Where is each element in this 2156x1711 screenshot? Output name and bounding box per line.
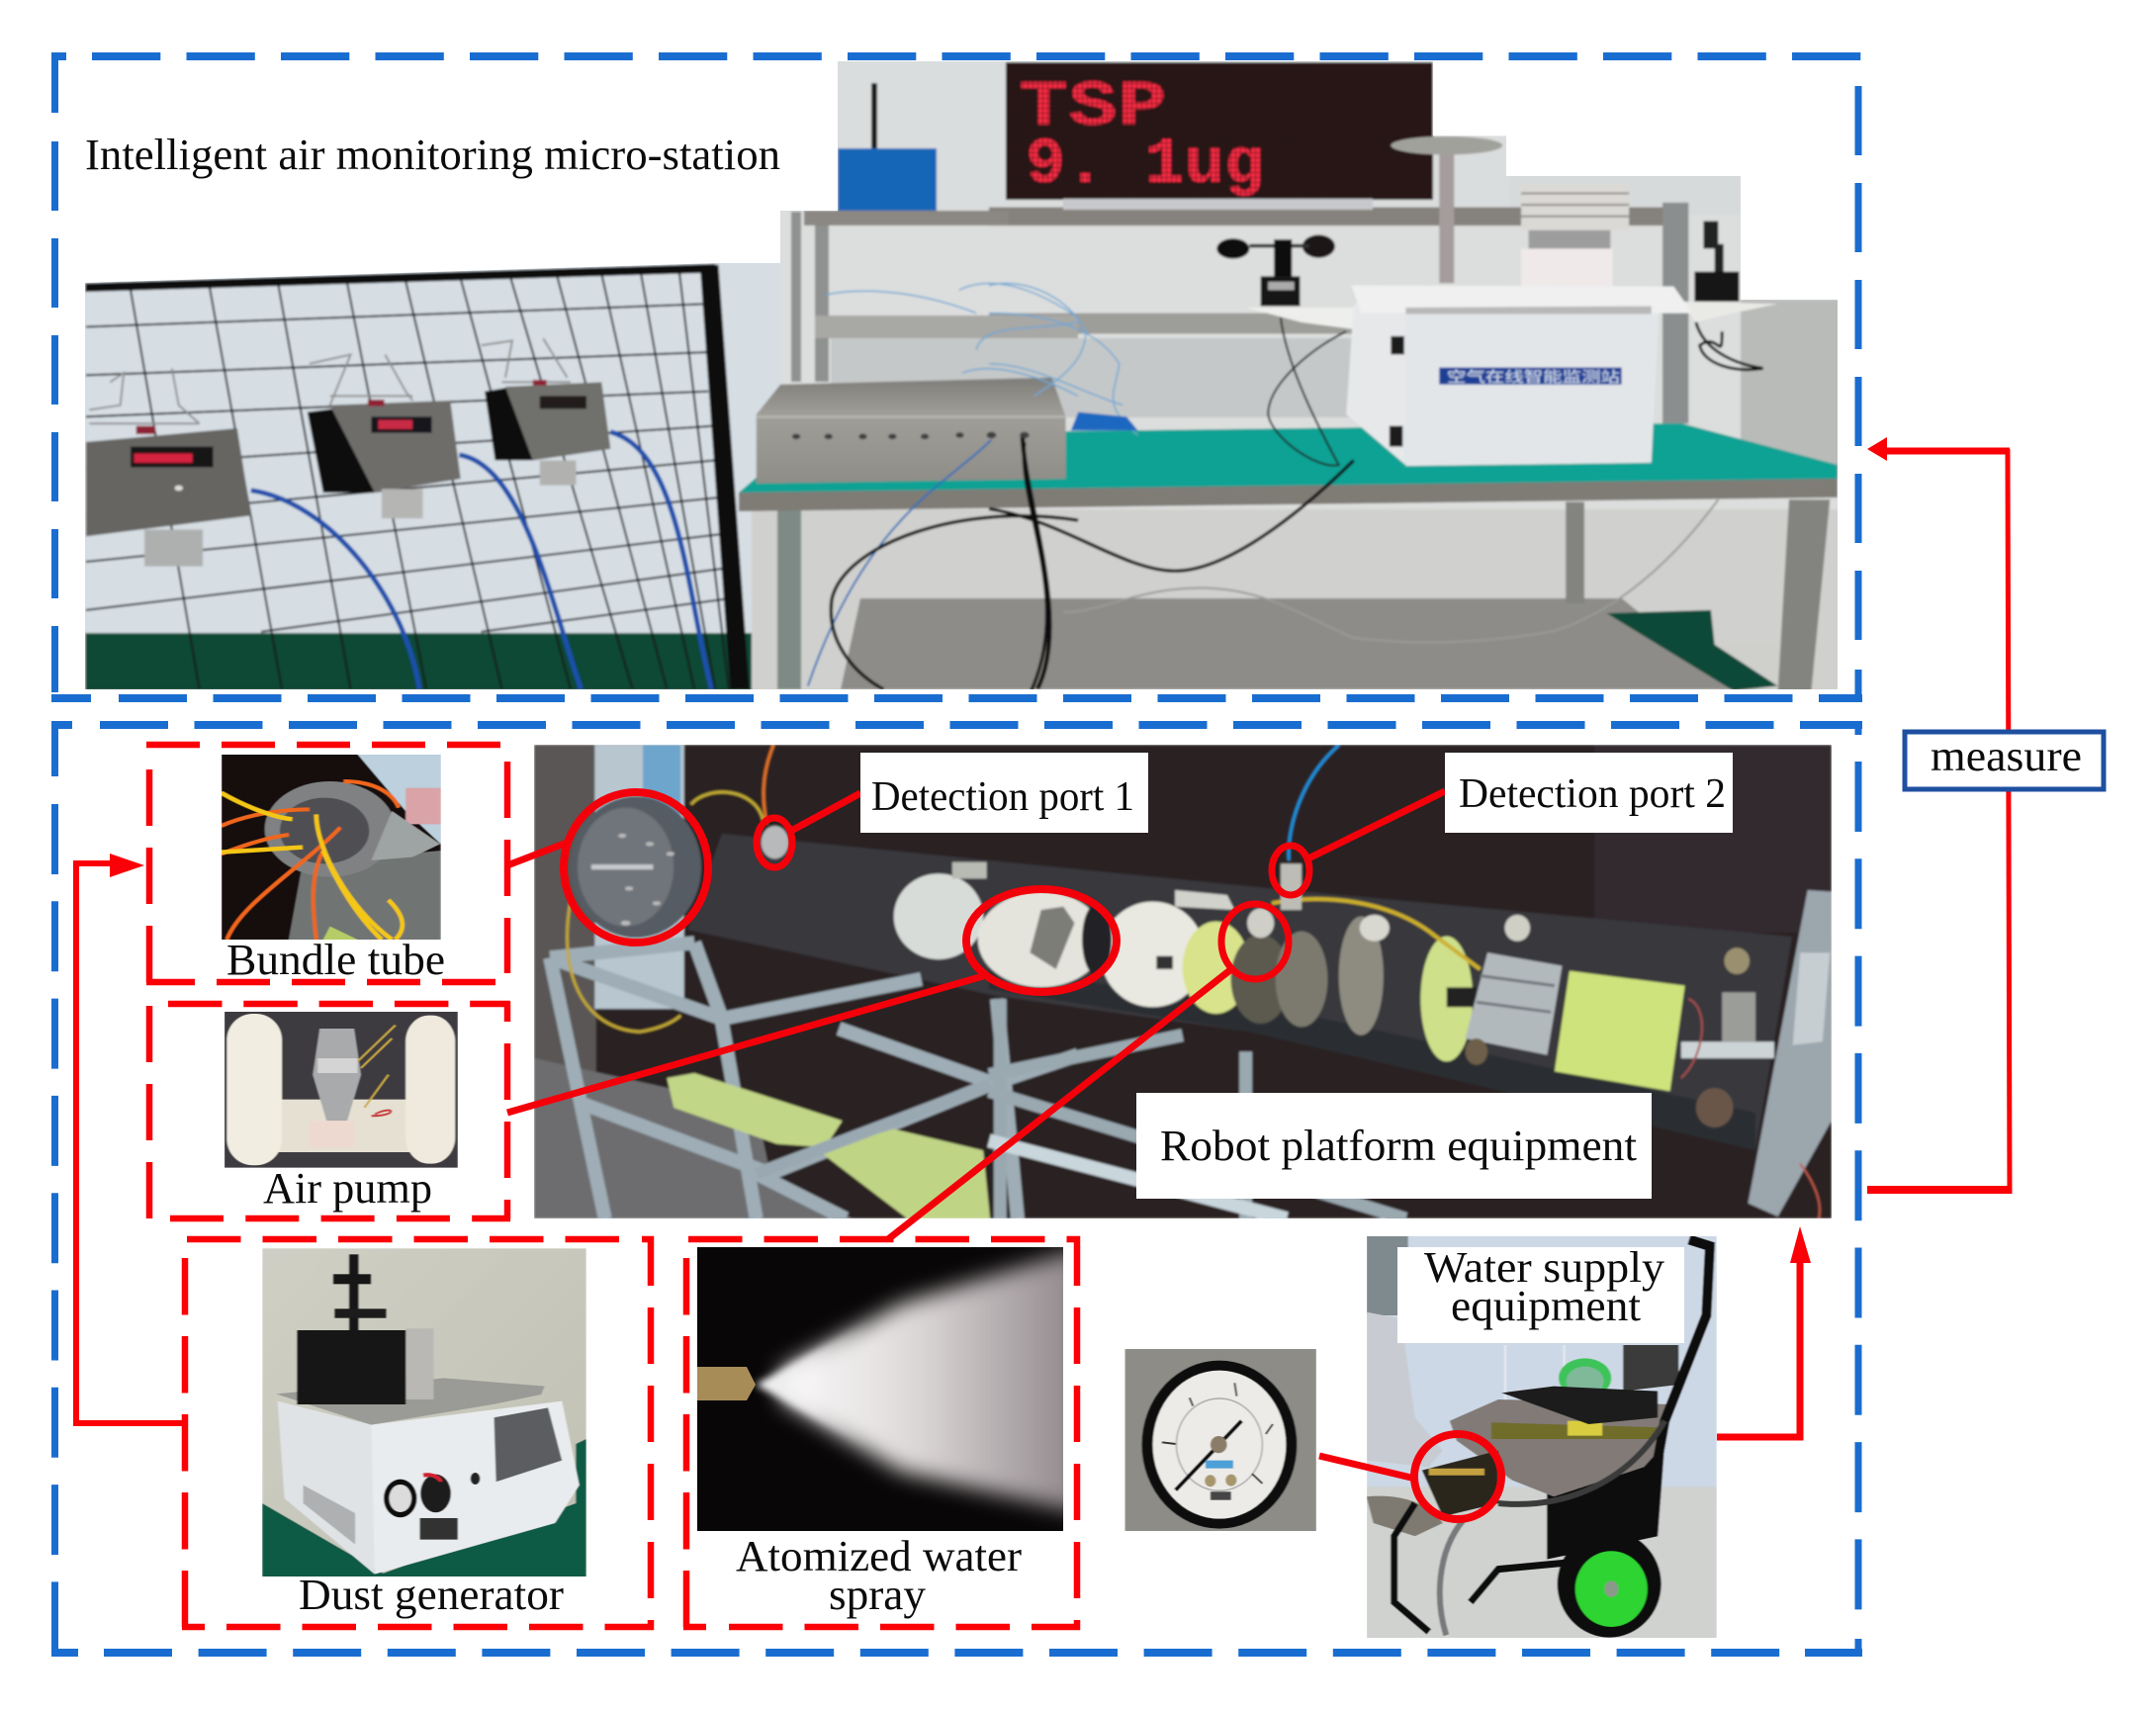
panel: intelligent air monitoring micro-station: [51, 52, 1862, 702]
photo: dust generator: [262, 1248, 586, 1576]
LED display: [1006, 62, 1433, 202]
wires and port 2: [1289, 745, 1339, 860]
photo: water supply equipment: [1367, 1236, 1717, 1639]
wind sensors: [1216, 238, 1249, 259]
green cylinders: [667, 1073, 843, 1147]
white carriage: [894, 873, 983, 959]
label: Robot platform equipment: [1136, 1093, 1652, 1199]
panel: robot platform and supply equipment: [51, 437, 2104, 1657]
LED display: 9. 1ug: [1026, 128, 1264, 202]
cables: [251, 432, 712, 689]
label: Atomized water spray: spray: [829, 1571, 926, 1619]
dashed border: lower panel: [51, 721, 1862, 1657]
wall, shelves and table: [1087, 241, 1733, 439]
label: Water supply equipment: Water supply: [1424, 1243, 1664, 1292]
label: Atomized water spray: [736, 1532, 1022, 1619]
label: Detection port 2: [1445, 753, 1733, 833]
red callout rings and leader lines: [507, 791, 1445, 1239]
photo: pressure gauge: [1125, 1349, 1316, 1531]
wires: [764, 745, 773, 824]
component: dust generator: [182, 1236, 654, 1630]
transparent tube end: [571, 796, 701, 938]
robot sections: [1101, 902, 1205, 1007]
sensors: [86, 428, 251, 536]
component: atomized water spray: [683, 1236, 1083, 1630]
tube body: [687, 834, 1792, 1150]
port 1 fitting: [762, 826, 788, 858]
hooks: [89, 338, 571, 423]
label: Detection port 1: Detection port 1: [871, 774, 1134, 820]
steel control box: [757, 284, 1078, 690]
sensor plates: [1246, 308, 1354, 329]
photo: monitoring station and sensors: [79, 59, 1849, 697]
dashed border: air pump: [149, 1002, 510, 1219]
photo: robot platform equipment in tube: [534, 745, 1832, 1218]
label: measure: measure: [1931, 732, 2082, 780]
label: Detection port 1: [860, 753, 1148, 833]
dashed border: bundle tube: [146, 745, 507, 982]
cabinet nameplate: 空气在线智能监测站: [1447, 366, 1620, 387]
label: Atomized water spray: Atomized water: [736, 1532, 1022, 1580]
arrow: dust generator and feed to bundle tube: [76, 854, 184, 1423]
aluminium frame: [550, 943, 1078, 1218]
label: Detection port 2: Detection port 2: [1459, 771, 1726, 817]
photo: bundle tube: [222, 755, 441, 940]
component: air pump: [149, 1002, 510, 1219]
dashed border: top panel: [51, 52, 1862, 702]
title: Intelligent air monitoring micro-station: Intelligent air monitoring micro-station: [85, 131, 780, 179]
label: Dust generator: Dust generator: [299, 1571, 564, 1619]
handle and frame: [1394, 1239, 1710, 1632]
label: Water supply equipment: [1397, 1243, 1684, 1343]
wall and floor behind the grid: [104, 267, 745, 635]
label: measure: [1905, 732, 2104, 789]
lower frame bars: [989, 999, 1405, 1218]
arrow: water supply to robot platform: [1717, 1226, 1811, 1437]
end plate: [1749, 890, 1832, 1216]
label: Water supply equipment: equipment: [1451, 1282, 1641, 1330]
label: Air pump: Air pump: [263, 1164, 432, 1213]
white analyzer cabinet: [1346, 304, 1405, 465]
blue box and antenna: [838, 148, 937, 211]
photo: air pump: [225, 1012, 458, 1168]
component: bundle tube: [146, 745, 507, 984]
dashed border: dust generator: [182, 1236, 654, 1630]
arrow: measure link from platform to micro-station: [1867, 437, 2010, 1194]
LED display: TSP: [1019, 70, 1167, 144]
photo: atomized spray: [697, 1247, 1083, 1531]
callout: water pump fitting ring and gauge leader: [1319, 1434, 1501, 1519]
dashed border: spray: [683, 1236, 1080, 1630]
table: [739, 423, 1838, 499]
label: Robot platform equipment: Robot platform equipment: [1160, 1122, 1637, 1170]
label: Bundle tube: Bundle tube: [226, 936, 445, 984]
antenna disc and fins: [1439, 149, 1454, 283]
